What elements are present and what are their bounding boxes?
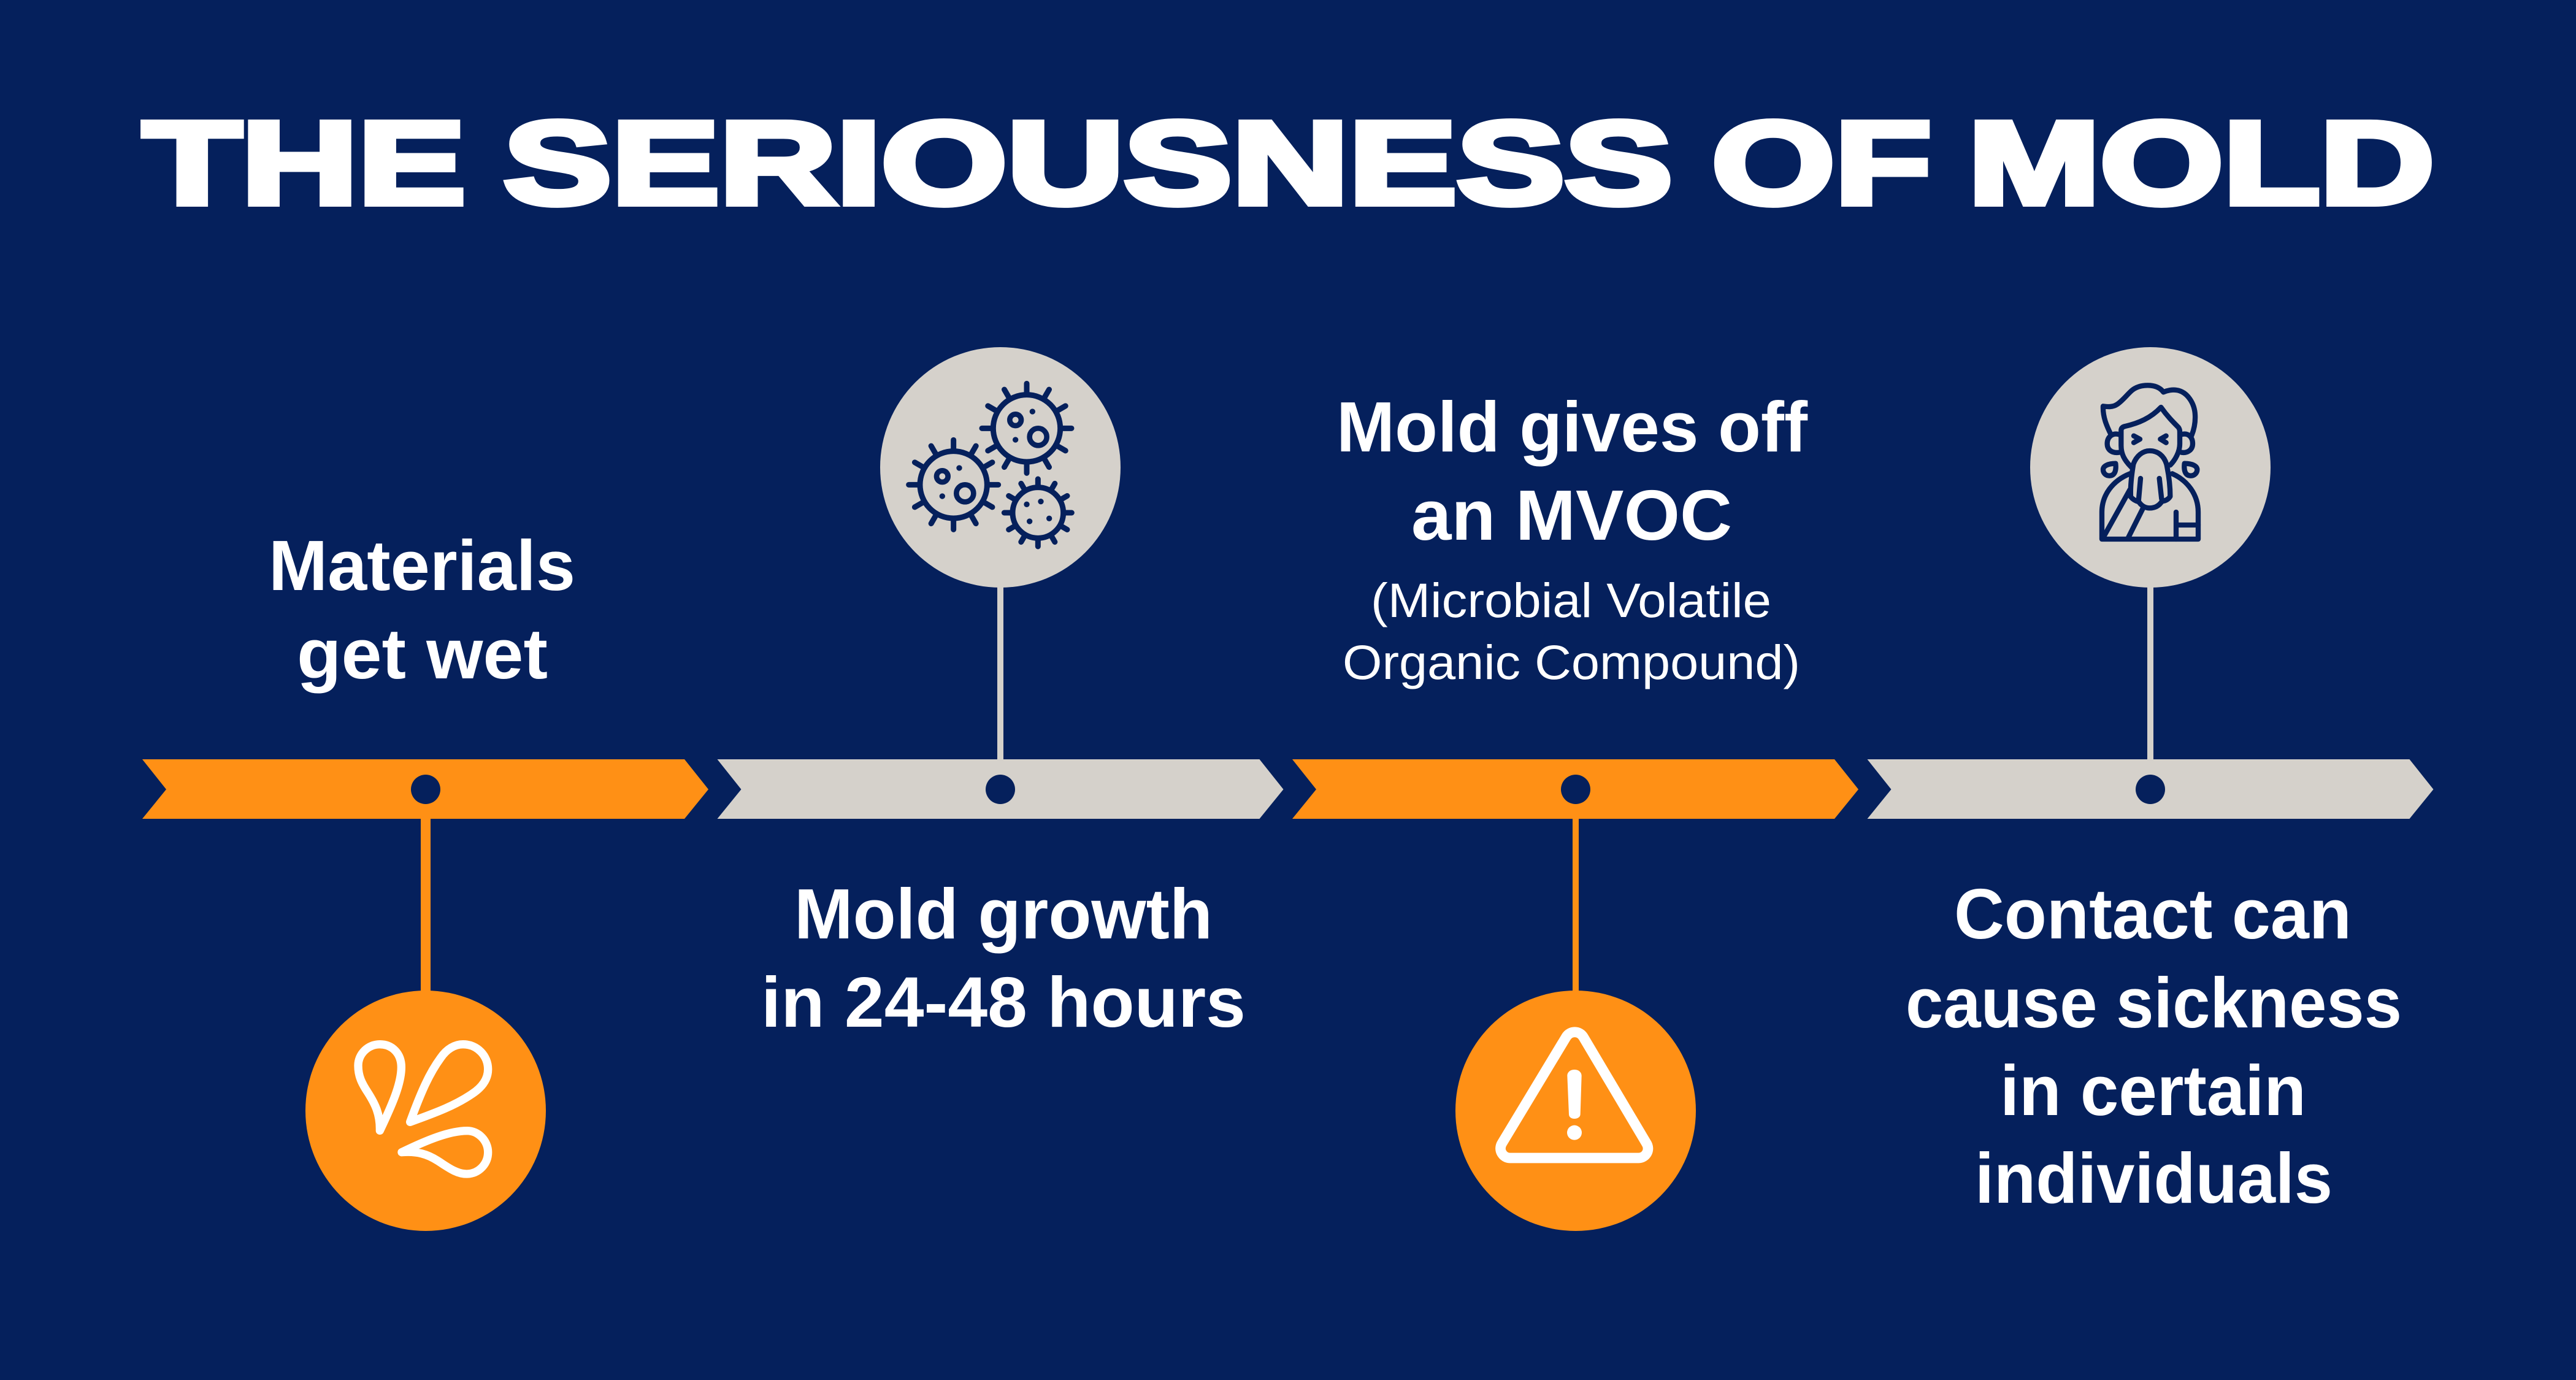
heading: mold gives off an MVOC: an MVOC [1411,475,1732,555]
icon: mold spores [909,383,1071,546]
title: OF [1712,97,1931,229]
connector 3 [1573,819,1579,994]
heading: mold growth in 24-48 hours: Mold growth [794,874,1213,954]
connector 1 [421,819,431,994]
connector 4 [2147,586,2153,759]
panel: step 1 materials get wet [142,526,708,1231]
heading: contact can cause sickness in certain individuals: cause sickness [1906,963,2402,1043]
title: SERIOUSNESS [504,97,1673,229]
timeline dot 1 [411,775,440,804]
timeline dot 2 [986,775,1015,804]
heading: materials get wet: get wet [297,614,548,694]
icon circle 1 [305,991,546,1231]
heading: contact can cause sickness in certain individuals: Contact can [1954,874,2352,954]
timeline dot 4 [2136,775,2165,804]
icon circle 2 [880,347,1121,588]
icon: sick person coughing [2102,385,2198,539]
title: THE [143,97,466,229]
heading: mold gives off an MVOC [1336,387,1807,555]
heading: contact can cause sickness in certain individuals: individuals [1975,1138,2333,1218]
heading: materials get wet: Materials [269,526,575,605]
arrow segment 3 [1292,759,1858,819]
text: MVOC definition: (Microbial Volatile [1371,573,1771,627]
text: MVOC definition: Organic Compound) [1343,635,1800,689]
spore upper right [982,383,1071,473]
arrow segment 1 [142,759,708,819]
heading: contact can cause sickness in certain individuals: in certain [2000,1051,2306,1130]
spore left [909,440,999,529]
panel: step 2 mold growth [718,347,1283,1042]
heading: materials get wet [269,526,575,694]
arrow segment 2 [718,759,1283,819]
arrow segment 4 [1867,759,2434,819]
title: MOLD [1968,97,2434,229]
icon: water droplets [358,1045,488,1174]
panel: step 4 contact can cause sickness [1867,347,2434,1218]
text: MVOC definition [1343,573,1800,689]
icon circle 4 [2030,347,2271,588]
heading: mold growth in 24-48 hours [761,874,1246,1042]
icon circle 3 [1455,991,1696,1231]
panel: step 3 mold gives off an MVOC [1292,387,1858,1231]
icon: warning triangle [1500,1032,1648,1158]
spore lower right [1004,479,1071,546]
heading: mold growth in 24-48 hours: in 24-48 hours [761,962,1246,1042]
heading: mold gives off an MVOC: Mold gives off [1336,387,1807,467]
connector 2 [997,586,1003,759]
title [143,97,2434,229]
heading: contact can cause sickness in certain individuals [1906,874,2402,1218]
timeline dot 3 [1561,775,1590,804]
